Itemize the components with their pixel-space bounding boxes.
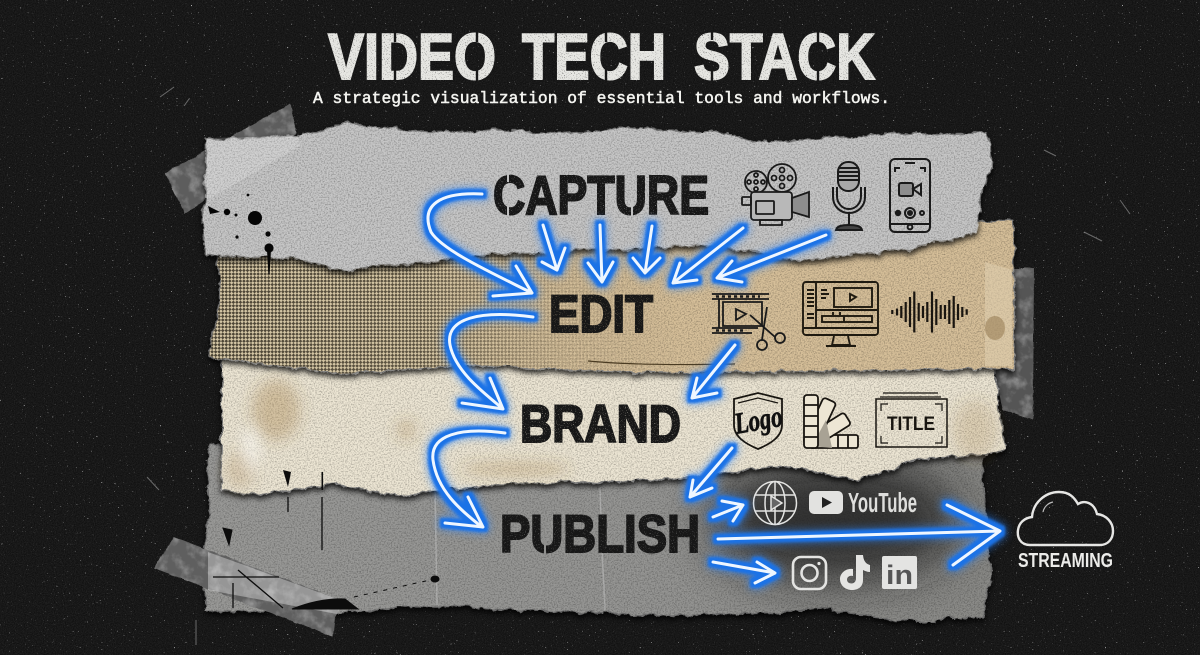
heading: capture: CAPTURE xyxy=(493,164,709,226)
icon: web globe xyxy=(754,482,796,524)
brand ink drips xyxy=(283,470,323,490)
arrow: publish to social xyxy=(713,562,775,583)
icon: tiktok xyxy=(840,555,870,590)
publish dark shading xyxy=(710,458,960,582)
subtitle: A strategic visualization of essential tools and workflows. xyxy=(313,89,890,108)
panel: edit paper xyxy=(200,215,1014,385)
arrow: brand to publish, left curve xyxy=(433,431,505,527)
icon: film camera xyxy=(742,164,809,225)
capture ink splatter xyxy=(208,194,274,274)
icon: film strip and scissors xyxy=(712,294,785,350)
panel: capture paper xyxy=(203,124,992,274)
heading: brand: BRAND xyxy=(520,395,681,454)
icon: linkedin: in xyxy=(886,560,913,590)
publish paper creases and ink marks xyxy=(213,487,605,610)
background scratches xyxy=(147,87,1130,645)
panel: publish paper xyxy=(205,445,990,622)
panel: brand paper xyxy=(222,360,1005,495)
icon: title card xyxy=(876,393,947,447)
capture tape overlay xyxy=(207,136,300,200)
tape: lower left xyxy=(154,537,343,637)
icon: title card: TITLE xyxy=(887,414,935,435)
arrow: capture down 3 xyxy=(633,226,660,273)
icon: logo shield: Logo xyxy=(731,400,785,441)
brand pale patch xyxy=(242,426,260,474)
arrow: publish to web xyxy=(713,501,743,521)
title: VIDEO xyxy=(328,20,496,93)
arrow: capture to edit, left curve xyxy=(428,194,532,296)
icon: youtube logo xyxy=(809,487,917,518)
icon: instagram xyxy=(793,557,826,589)
arrow: capture down 1 xyxy=(542,225,565,270)
tape: right side xyxy=(993,268,1034,420)
halftone hatch xyxy=(209,252,647,374)
arrow: capture down 2 xyxy=(588,225,613,282)
arrow: camera to edit xyxy=(673,228,743,283)
title: TECH xyxy=(522,20,666,93)
edit stain xyxy=(985,316,1005,340)
arrow: edit icons to brand xyxy=(692,345,735,398)
icon: phone with video xyxy=(890,159,930,232)
label: streaming: STREAMING xyxy=(1018,550,1113,572)
arrow: brand icons to publish xyxy=(690,448,732,497)
tape: upper left, under paper xyxy=(165,104,297,214)
arrow: publish to streaming xyxy=(718,505,1000,565)
edit lighter patch xyxy=(985,262,1012,366)
icon: colour swatch fan xyxy=(803,395,858,449)
icon: microphone xyxy=(833,162,865,230)
heading: edit: EDIT xyxy=(549,285,653,344)
neon arrows xyxy=(428,194,1000,583)
icon: audio waveform xyxy=(892,292,967,332)
heading: publish: PUBLISH xyxy=(500,505,700,564)
icon: youtube logo: YouTube xyxy=(848,487,917,518)
title xyxy=(328,20,875,93)
icon: linkedin xyxy=(882,556,917,590)
arrow: microphone to edit xyxy=(717,235,826,282)
icon: streaming cloud xyxy=(1018,492,1113,545)
icon: logo shield xyxy=(731,393,785,449)
brand stains xyxy=(226,380,997,488)
title: STACK xyxy=(694,20,875,93)
icon: editing monitor xyxy=(803,282,878,346)
arrow: edit to brand, left curve xyxy=(450,315,533,409)
